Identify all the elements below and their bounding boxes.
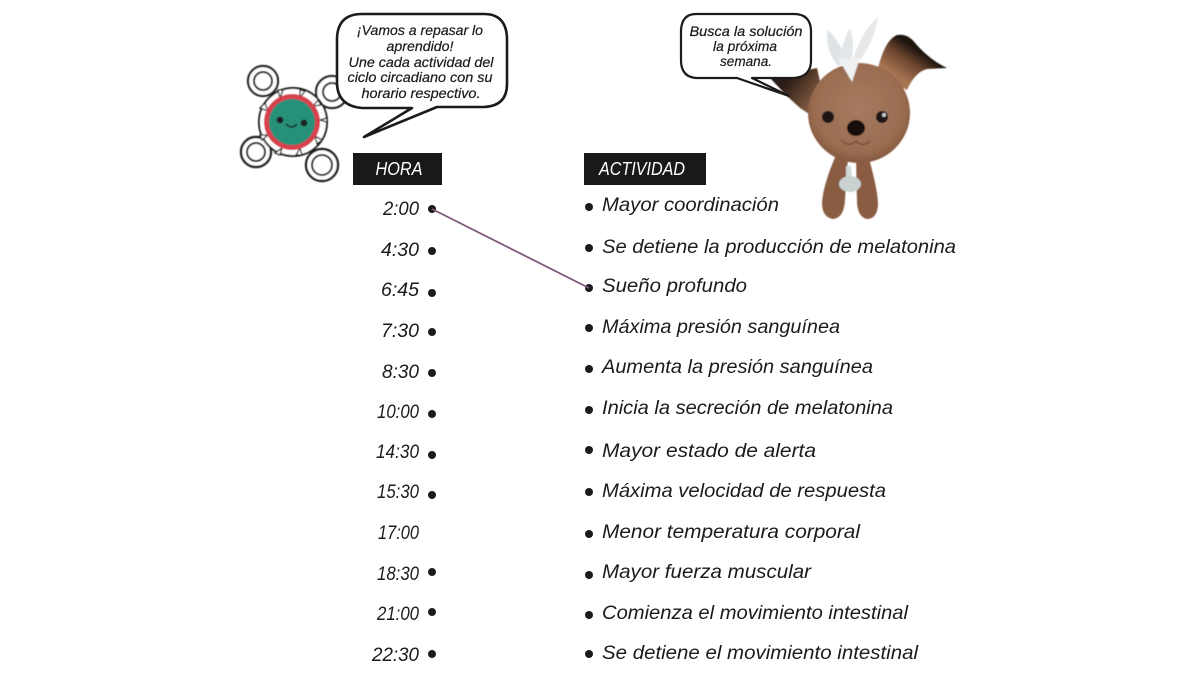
list: activities column: Sueño profundo [602, 276, 747, 297]
callout: repaso speech bubble [337, 14, 507, 137]
callout: repaso speech bubble: ciclo circadiano con su [348, 70, 493, 85]
heading: HORA [353, 153, 442, 185]
list: activities column: Se detiene la producción de melatonina [602, 237, 956, 258]
list: activities column: Menor temperatura corporal [602, 522, 861, 543]
list: hours column: 17:00 [378, 523, 419, 544]
list: activities column: Se detiene el movimiento intestinal [602, 643, 919, 664]
heading: ACTIVIDAD [584, 153, 706, 185]
arrow: example connection line from 2:00 to Sueño profundo [432, 209, 589, 288]
list: hours column: 7:30 [381, 321, 419, 342]
callout: repaso speech bubble: Une cada actividad del [348, 55, 495, 70]
list: activities column: Máxima velocidad de respuesta [602, 481, 886, 502]
list: hours column: 8:30 [382, 362, 419, 383]
list: hours column: 10:00 [377, 402, 419, 423]
icon: virus character [241, 66, 348, 181]
list: hour connection dots [428, 205, 436, 658]
callout: próxima semana speech bubble: Busca la solución [690, 24, 802, 39]
icon: brown plush dog [770, 17, 947, 219]
list: activities column: Máxima presión sanguínea [602, 317, 840, 338]
list: activity connection dots [585, 203, 593, 658]
callout: próxima semana speech bubble [681, 14, 811, 96]
list: hours column [371, 199, 419, 666]
list: activities column: Comienza el movimiento intestinal [602, 603, 909, 624]
list: hours column: 2:00 [382, 199, 419, 220]
list: activities column: Mayor estado de alerta [602, 441, 816, 462]
callout: repaso speech bubble: ¡Vamos a repasar lo [357, 23, 484, 38]
heading: HORA: HORA [376, 159, 422, 179]
list: hours column: 14:30 [376, 442, 419, 463]
list: hours column: 22:30 [371, 645, 419, 666]
list: activities column: Mayor coordinación [602, 195, 779, 216]
callout: próxima semana speech bubble: semana. [720, 54, 772, 69]
list: activities column [601, 195, 956, 664]
callout: repaso speech bubble: horario respectivo. [362, 86, 480, 101]
callout: repaso speech bubble: aprendido! [386, 39, 454, 54]
list: hours column: 15:30 [377, 482, 419, 503]
list: activities column: Inicia la secreción de melatonina [602, 398, 893, 419]
callout: próxima semana speech bubble: la próxima [713, 39, 777, 54]
list: hours column: 21:00 [376, 604, 419, 625]
list: hours column: 6:45 [381, 280, 419, 301]
list: hours column: 18:30 [377, 564, 419, 585]
heading: ACTIVIDAD: ACTIVIDAD [598, 159, 685, 179]
list: activities column: Mayor fuerza muscular [602, 562, 812, 583]
list: activities column: Aumenta la presión sanguínea [601, 357, 873, 378]
list: hours column: 4:30 [381, 240, 419, 261]
